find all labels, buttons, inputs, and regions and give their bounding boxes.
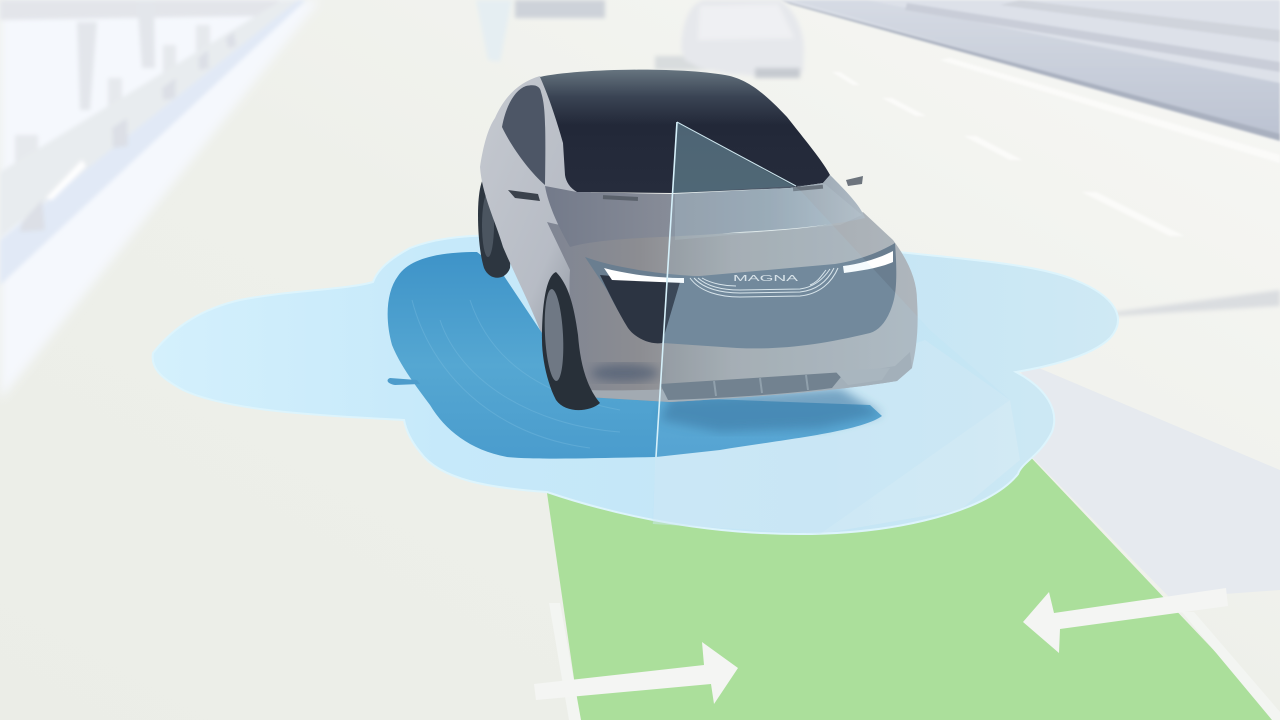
- car lower intake: [660, 372, 845, 400]
- car right headlight strip: [843, 251, 893, 273]
- scenery: left bridge and guard rail: [0, 0, 320, 400]
- car body side: [480, 76, 600, 360]
- front camera cone: [652, 122, 1010, 534]
- car: [478, 70, 918, 410]
- arrow: right lane edge pushing left: [1023, 588, 1280, 720]
- car hood vents: [603, 195, 638, 201]
- car grille lines: [690, 268, 838, 297]
- car front fascia: [547, 212, 918, 402]
- distant traffic on the left: [476, 0, 605, 62]
- car bumper: [584, 352, 912, 402]
- car far side wheel: [478, 175, 510, 278]
- arrow: left lane edge pushing right: [534, 603, 738, 720]
- car shadow on the ground: [388, 252, 882, 459]
- car fascia shading: [591, 364, 659, 382]
- faint shadow across the right lane: [1115, 290, 1280, 316]
- car hood: [545, 175, 865, 247]
- scenery: right guard rail: [780, 0, 1280, 141]
- car dark front panel: [585, 243, 896, 348]
- car left headlight strip: [604, 268, 684, 283]
- distant car ahead: [655, 0, 804, 78]
- green target lane: [547, 447, 1280, 720]
- blue sensor field: [153, 235, 1118, 534]
- car left grille shadow: [600, 275, 680, 343]
- car near front wheel: [542, 272, 600, 410]
- car side windows: [502, 85, 545, 185]
- car left mirror: [508, 190, 540, 201]
- car right mirror: [846, 176, 863, 186]
- right rear sensor beam: [1020, 360, 1280, 598]
- car brand wordmark: MAGNA: [733, 274, 799, 283]
- lane markings: [832, 58, 1280, 236]
- car windshield and roof: [540, 70, 830, 193]
